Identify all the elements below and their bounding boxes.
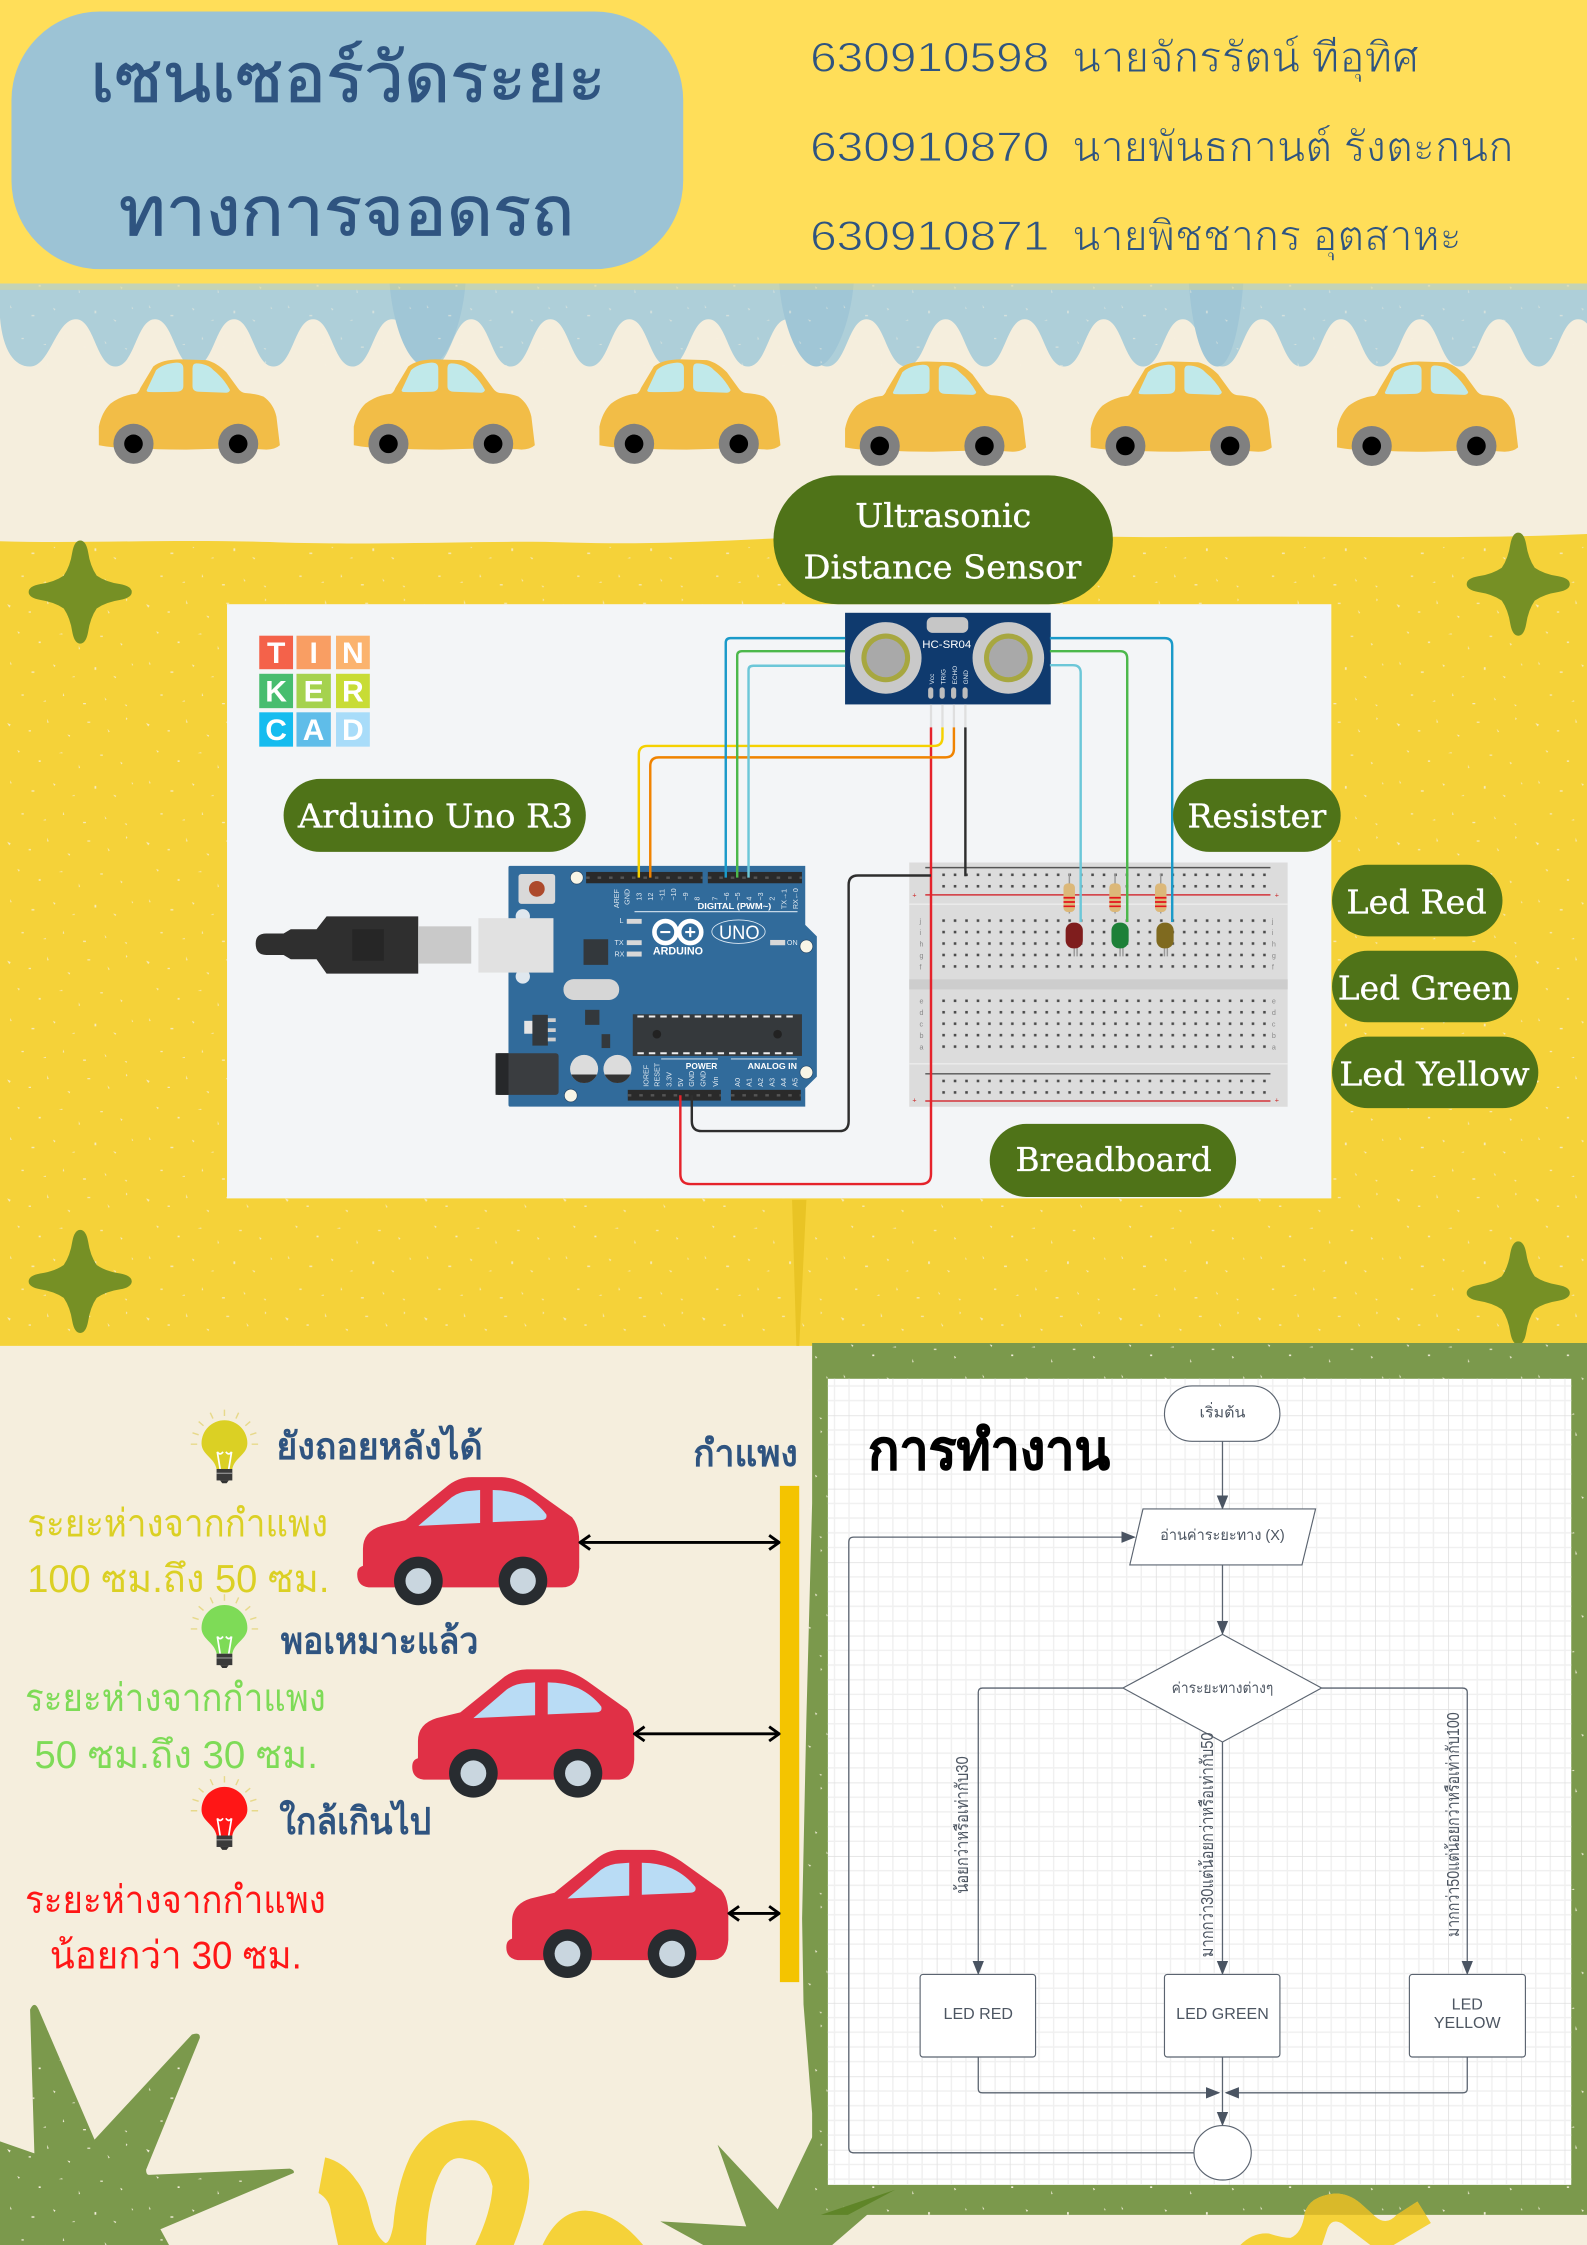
left transducer (850, 622, 922, 694)
power labels: ANALOG IN (748, 1061, 797, 1071)
reset button (518, 874, 555, 904)
breadboard: + (1275, 892, 1279, 900)
breadboard: + (912, 1096, 917, 1104)
student 3: นายพิชชากร อุตสาหะ (1072, 212, 1462, 261)
ultrasonic sensor: GND (963, 670, 970, 684)
burst overlap on frame (821, 2190, 895, 2215)
frame speckle (805, 1343, 1587, 2215)
yellow car 4 (845, 362, 1026, 466)
digital pin labels: ~3 (757, 892, 765, 901)
circuit diagram panel (227, 604, 1331, 1198)
resistors (1063, 873, 1166, 913)
digital pin labels: ~5 (734, 892, 742, 901)
breadboard: c (920, 1021, 924, 1029)
tinkercad logo: I (309, 637, 318, 670)
yellow distance text: 100 ซม.ถึง 50 ซม. (27, 1558, 329, 1601)
ultrasonic sensor: ECHO (952, 666, 959, 684)
digital pin labels: RX←0 (792, 888, 800, 909)
digital pin labels: ~11 (659, 889, 667, 901)
dripping blue band (0, 283, 1587, 367)
condition label green: มากกว่า30แต่น้อยกว่าหรือเท่ากับ50 (1197, 1732, 1217, 1957)
header band (0, 0, 1587, 283)
arduino logo: ARDUINO (653, 945, 703, 957)
status text: can still reverse: ยังถอยหลังได้ (276, 1424, 483, 1467)
digital pin labels: 12 (647, 893, 655, 901)
label: ultrasonic distance sensor: Ultrasonic (855, 496, 1031, 535)
breadboard: b (920, 1032, 924, 1040)
arduino uno board: GND (700, 1071, 708, 1087)
bulb green (191, 1594, 258, 1668)
red distance text: น้อยกว่า 30 ซม. (50, 1935, 302, 1978)
student 2 (810, 123, 1513, 170)
decorative green burst right (660, 2131, 895, 2245)
arduino uno board: Vin (712, 1076, 720, 1087)
digital pin labels (613, 888, 800, 909)
ultrasonic sensor: TRIG (940, 669, 947, 684)
flowchart heading: การทำงาน (868, 1420, 1110, 1481)
led green box (1164, 1974, 1280, 2057)
digital pin labels: ~10 (670, 888, 678, 901)
yellow car 6 (1337, 362, 1518, 466)
breadboard: g (1272, 952, 1276, 960)
input node (1130, 1509, 1316, 1565)
digital pin labels: AREF (613, 888, 621, 908)
label: led red: Led Red (1346, 882, 1487, 921)
breadboard: + (1275, 1096, 1279, 1104)
arduino uno board: A3 (769, 1078, 777, 1087)
arduino uno board: A1 (745, 1078, 753, 1087)
label: led yellow: Led Yellow (1339, 1054, 1530, 1093)
breadboard: h (920, 940, 924, 948)
arduino uno board: A2 (757, 1078, 765, 1087)
flowchart frame (802, 1343, 1587, 2215)
right transducer (973, 622, 1044, 694)
status text: just right: พอเหมาะแล้ว (281, 1620, 478, 1662)
led yellow box: LED (1452, 1995, 1483, 2013)
pin headers (586, 872, 802, 1101)
arduino uno board: RESET (654, 1062, 662, 1087)
tinkercad logo: A (303, 714, 325, 747)
star bottom left (29, 1230, 132, 1333)
breadboard: e (920, 998, 924, 1006)
small ics (524, 939, 610, 1048)
tx rx led labels: RX (614, 950, 625, 958)
yellow distance text (27, 1502, 329, 1601)
condition label red: น้อยกว่าหรือเท่ากับ30 (952, 1756, 972, 1894)
digital pin labels: ~6 (723, 892, 731, 901)
red distance text: ระยะห่างจากกำแพง (25, 1879, 326, 1922)
led red (1066, 923, 1083, 956)
led yellow (1156, 923, 1174, 956)
start node: เริ่มต้น (1200, 1401, 1245, 1421)
title text line 2: ทางการจอดรถ (119, 173, 574, 250)
breadboard: d (1272, 1009, 1276, 1017)
flowchart grid panel (828, 1379, 1571, 2185)
tx rx led labels (614, 917, 798, 958)
breadboard: + (912, 892, 917, 900)
led yellow box (1409, 1974, 1525, 2057)
ultrasonic sensor: Vcc (929, 673, 936, 684)
label: ultrasonic distance sensor: Distance Sensor (804, 547, 1082, 586)
star top left (29, 540, 132, 644)
red distance text (25, 1879, 326, 1978)
digital pin labels: 2 (769, 897, 777, 901)
bottom right yellow squiggle (1240, 2193, 1431, 2245)
start node (1164, 1386, 1280, 1441)
wall label: กำแพง (693, 1432, 798, 1474)
breadboard: i (1272, 929, 1274, 937)
wiring (639, 638, 1172, 1184)
tinkercad logo: N (342, 637, 364, 670)
tinkercad logo: K (265, 676, 287, 709)
decorative yellow squiggle (319, 2120, 643, 2245)
breadboard: j (919, 917, 922, 925)
digital pin labels: 8 (694, 897, 702, 901)
distance arrow 2 (635, 1733, 779, 1735)
yellow car 2 (354, 359, 535, 464)
breadboard: i (920, 929, 922, 937)
condition label yellow: มากกว่า50แต่น้อยกว่าหรือเท่ากับ100 (1443, 1712, 1463, 1937)
decorative green burst left (0, 2005, 294, 2245)
arduino logo (653, 920, 765, 957)
ultrasonic sensor (845, 613, 1051, 727)
tinkercad logo: R (342, 676, 364, 709)
tx rx led labels: ON (787, 939, 798, 947)
tinkercad logo: E (304, 676, 324, 709)
ultrasonic sensor: HC-SR04 (922, 639, 972, 651)
capacitors (570, 1055, 632, 1083)
red car 3 (506, 1850, 728, 1978)
decision node (1123, 1634, 1322, 1742)
label: led green: Led Green (1338, 968, 1513, 1007)
digital pin labels: 7 (712, 897, 720, 901)
breadboard: a (920, 1043, 924, 1051)
yellow circuit band (0, 534, 1587, 1346)
band seam (792, 1200, 806, 1346)
power labels (686, 1061, 797, 1071)
green distance text: ระยะห่างจากกำแพง (25, 1677, 326, 1720)
label: arduino uno r3 (284, 779, 586, 852)
digital label: DIGITAL (PWM~) (698, 901, 771, 911)
arduino uno board: A0 (734, 1078, 742, 1087)
label: ultrasonic distance sensor (773, 475, 1113, 604)
red car 1 (357, 1477, 579, 1605)
power jack (496, 1053, 559, 1095)
tinkercad logo: T (267, 637, 286, 670)
label: breadboard (990, 1124, 1236, 1197)
arduino uno board: A4 (780, 1078, 788, 1087)
student 2: นายพันธกานต์ รังตะกนก (1072, 123, 1513, 170)
usb cable and plug (256, 909, 553, 984)
breadboard: e (1272, 998, 1276, 1006)
yellow distance text: ระยะห่างจากกำแพง (27, 1502, 328, 1545)
tx rx led labels: TX (614, 939, 624, 947)
title pill (11, 11, 683, 269)
wall (780, 1486, 799, 1982)
arduino logo: UNO (719, 923, 760, 944)
yellow car 3 (599, 359, 780, 464)
label: resister (1173, 779, 1341, 852)
status text: too close: ใกล้เกินไป (279, 1799, 431, 1842)
star bottom right (1467, 1241, 1570, 1344)
breadboard: h (1272, 940, 1276, 948)
input node: อ่านค่าระยะทาง (X) (1160, 1527, 1285, 1544)
breadboard: d (920, 1009, 924, 1017)
digital pin labels: 13 (636, 893, 644, 901)
green distance text (25, 1677, 326, 1777)
atmega chip (633, 1014, 802, 1056)
breadboard: f (920, 963, 922, 971)
student 1: นายจักรรัตน์ ทีอุทิศ (1072, 34, 1419, 83)
tinkercad logo: D (342, 714, 364, 747)
student 1: 630910598 (810, 34, 1049, 81)
tx rx led labels: L (619, 917, 623, 925)
led red box: LED RED (944, 2005, 1013, 2023)
led green (1111, 923, 1129, 956)
led yellow box: YELLOW (1434, 2014, 1502, 2032)
breadboard: j (1271, 917, 1274, 925)
led green box: LED GREEN (1176, 2005, 1269, 2023)
breadboard: c (1272, 1021, 1276, 1029)
student 3 (810, 212, 1462, 261)
green distance text: 50 ซม.ถึง 30 ซม. (34, 1734, 318, 1777)
title text line 1: เซนเซอร์วัดระยะ (90, 40, 606, 117)
distance arrow 1 (580, 1541, 779, 1543)
breadboard (909, 862, 1288, 1107)
arduino uno board: 3.3V (665, 1072, 673, 1087)
crystal (563, 979, 619, 1000)
digital pin labels: ~9 (682, 892, 690, 901)
tinkercad logo: C (265, 714, 287, 747)
led red box (920, 1974, 1036, 2057)
red car 2 (412, 1669, 634, 1798)
breadboard: b (1272, 1032, 1276, 1040)
label: led red (1332, 865, 1502, 936)
breadboard: g (920, 952, 924, 960)
label: led green (1332, 951, 1518, 1022)
yellow car 1 (99, 359, 280, 464)
arduino uno board: GND (688, 1071, 696, 1087)
digital pin labels: GND (624, 889, 632, 905)
label: arduino uno r3: Arduino Uno R3 (297, 797, 573, 836)
bulb yellow (191, 1410, 258, 1483)
decision node: ค่าระยะทางต่างๆ (1172, 1680, 1273, 1697)
breadboard: a (1272, 1043, 1276, 1051)
label: breadboard: Breadboard (1016, 1140, 1212, 1179)
breadboard: f (1272, 963, 1274, 971)
arduino uno board: A5 (791, 1078, 799, 1087)
yellow car 5 (1091, 362, 1272, 466)
distance arrow 3 (729, 1912, 779, 1914)
flowchart connectors (849, 1441, 1467, 2153)
power labels: POWER (686, 1061, 718, 1071)
end node (1194, 2126, 1251, 2180)
arduino uno board: IOREF (643, 1064, 651, 1087)
tinkercad logo (259, 636, 370, 747)
label: resister: Resister (1187, 797, 1327, 836)
digital pin labels: TX→1 (780, 889, 788, 909)
student 2: 630910870 (810, 123, 1049, 170)
star top right (1467, 533, 1570, 636)
digital pin labels: 4 (745, 897, 753, 901)
bulb red (191, 1776, 258, 1850)
arduino uno board: 5V (677, 1078, 685, 1087)
arduino uno board (496, 866, 817, 1107)
student 3: 630910871 (810, 212, 1049, 259)
student 1 (810, 34, 1419, 83)
label: led yellow (1332, 1037, 1538, 1108)
